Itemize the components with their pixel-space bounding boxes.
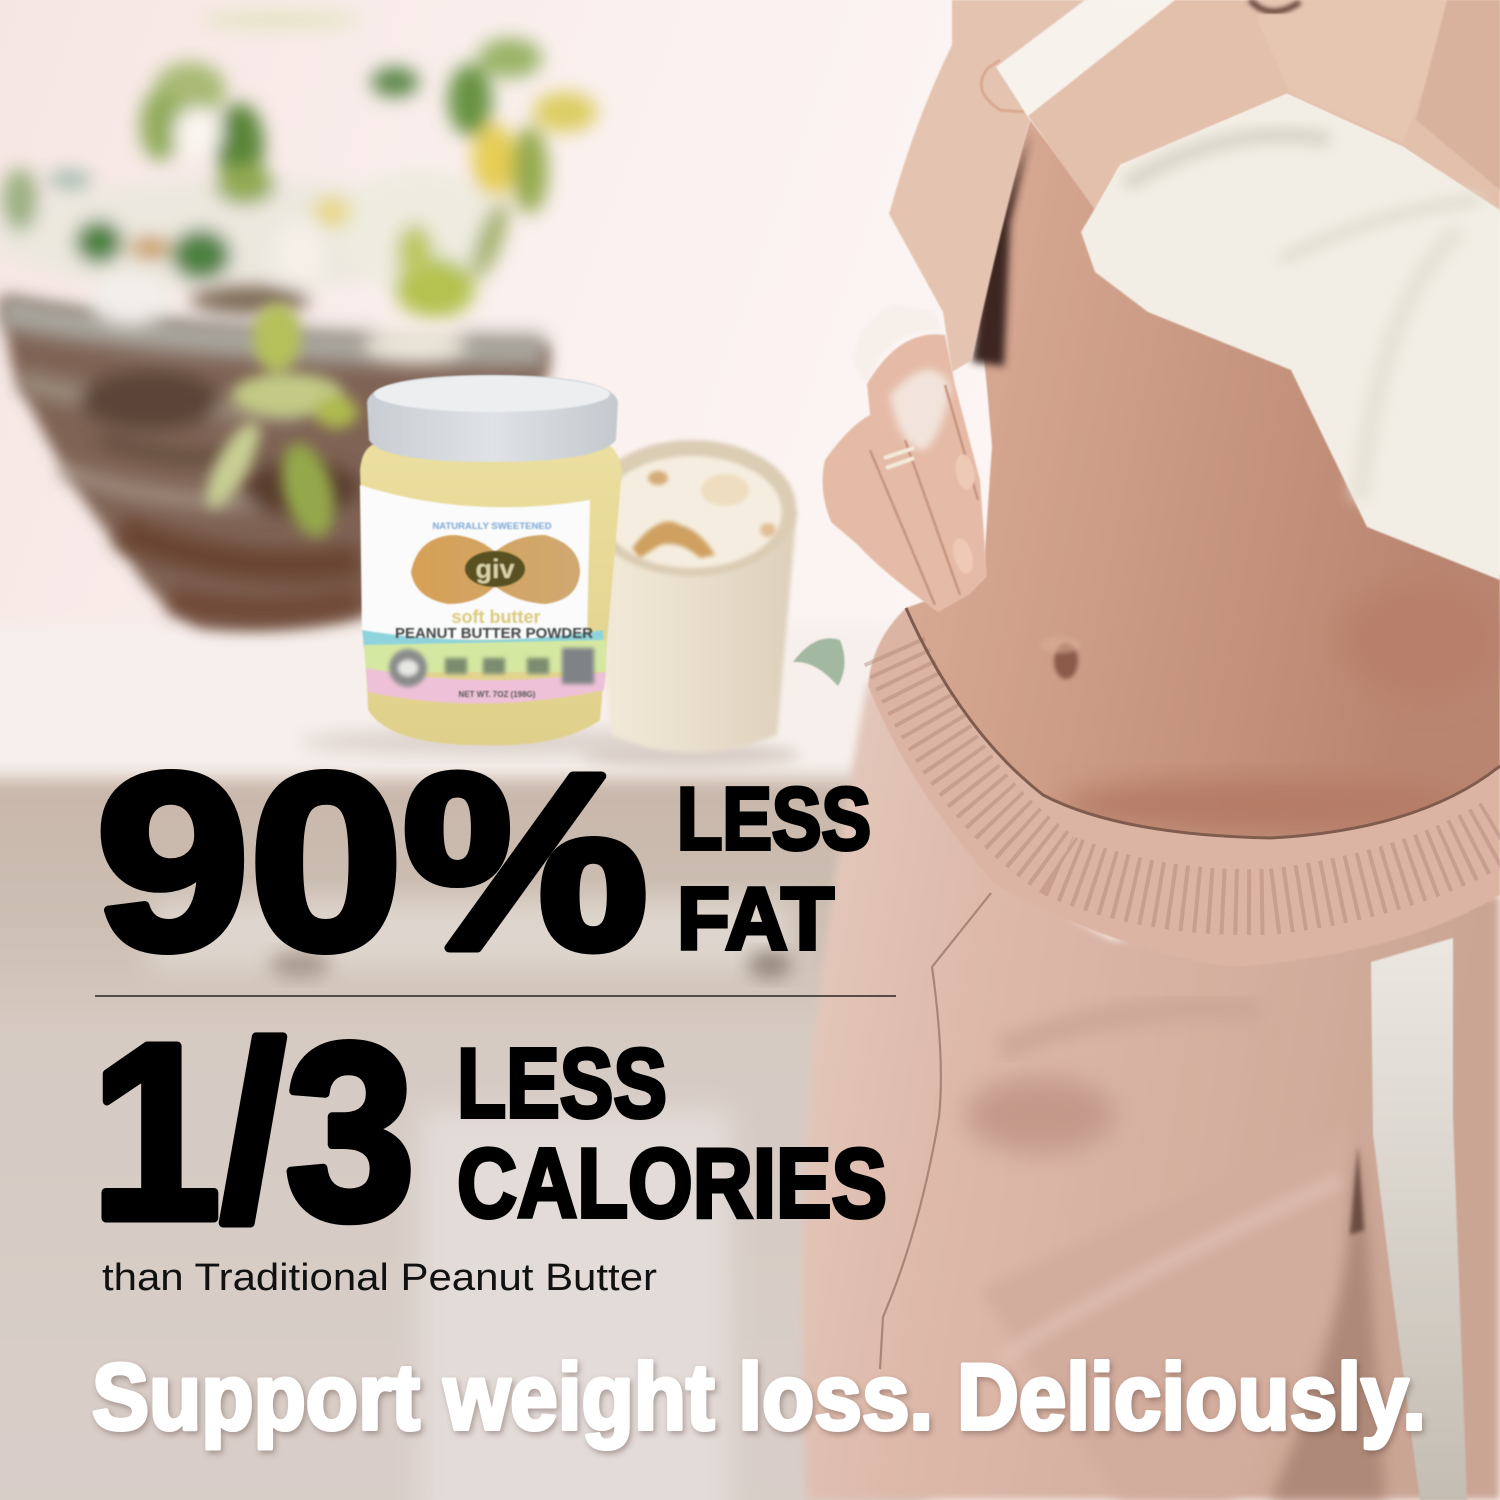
hand on waist — [823, 334, 987, 612]
logo badge: giv — [475, 554, 515, 584]
label LESS FAT — [677, 769, 871, 968]
raised arm — [1028, 0, 1500, 215]
plant basket — [0, 221, 549, 631]
left forearm and wrist — [889, 0, 1090, 372]
navel — [1040, 637, 1080, 679]
stat: 90% less fat — [96, 722, 871, 1001]
glass of peanut butter drink — [580, 440, 800, 767]
elastic waistband — [868, 608, 1500, 967]
stat: 1/3 less calories — [91, 992, 887, 1271]
jar net weight: NET WT. 7OZ (198G) — [459, 690, 536, 699]
tied jacket knot — [1250, 0, 1500, 190]
label LESS CALORIES: CALORIES — [457, 1128, 887, 1238]
label LESS CALORIES — [457, 1028, 887, 1238]
pants seam — [880, 893, 991, 1369]
left sleeve — [854, 304, 943, 384]
white sleeve — [1081, 94, 1500, 580]
label LESS FAT: FAT — [677, 869, 834, 968]
figure 1/3: 1/3 — [91, 992, 415, 1271]
comparison note: than Traditional Peanut Butter — [102, 1257, 657, 1299]
label LESS FAT: LESS — [677, 769, 871, 868]
white cuff — [996, 0, 1175, 116]
jar brand line: soft butter — [452, 607, 540, 627]
peanut butter jar — [360, 375, 622, 745]
jar seal and info strip — [389, 648, 594, 687]
pants — [802, 680, 1500, 1500]
torso — [906, 120, 1500, 838]
small leaf — [793, 638, 845, 686]
plant foliage — [0, 12, 597, 318]
trailing leaves — [196, 303, 358, 543]
pleat shadow — [1270, 1145, 1385, 1500]
jar lid — [367, 375, 618, 462]
pants side stripe — [1371, 938, 1467, 1500]
shadow under arm — [972, 134, 1030, 366]
logo badge — [465, 551, 525, 587]
peanut logo — [411, 535, 580, 604]
jar product name: PEANUT BUTTER POWDER — [395, 625, 593, 642]
jar tagline: NATURALLY SWEETENED — [432, 521, 552, 532]
ring — [884, 448, 914, 468]
figure 90%: 90% — [96, 722, 648, 1001]
label LESS CALORIES: LESS — [457, 1028, 667, 1138]
